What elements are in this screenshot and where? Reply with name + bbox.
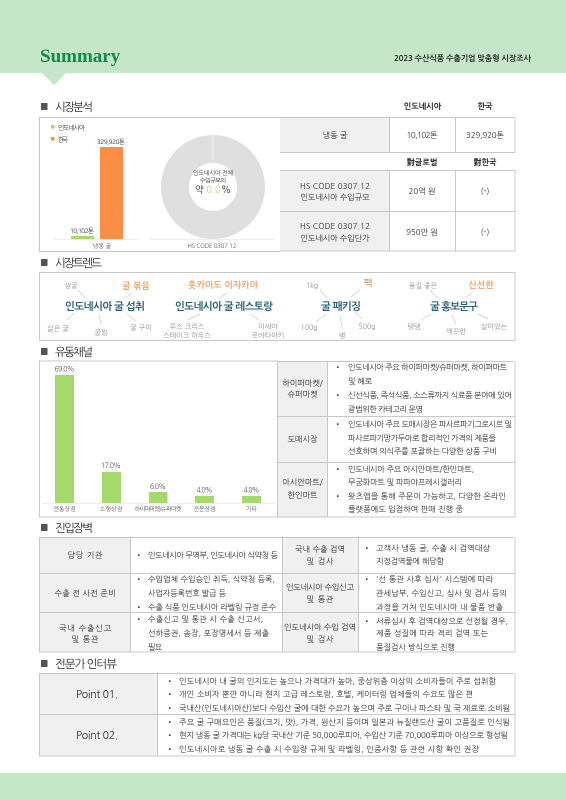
row: hypermarket: 인도네시아 주요 하이퍼마켓/슈퍼마켓, 하이퍼마트: [348, 363, 507, 372]
point 01: 개인 소비자 뿐만 아니라 현지 고급 레스토랑, 호텔, 케이터링 업체들의 수요도 많은 편: [179, 690, 473, 699]
cell: pre-export preparation: 사업자등록번호 발급 등: [148, 589, 226, 598]
legend: 한국: [58, 136, 68, 143]
trend: oyster packaging: 500g: [359, 324, 375, 331]
cell: indonesia import quarantine: •: [363, 618, 371, 626]
cell: responsible agencies: 담당 기관: [68, 551, 103, 560]
bar: other: 4.0%: [244, 488, 260, 494]
cell: indonesia import clearance: 인도네시아 수입신고: [286, 583, 354, 592]
bar: small stores: [100, 463, 122, 512]
row: asian mart: 플랫폼에도 입점하여 판매 진행 중: [348, 505, 463, 514]
row: wholesale market: [287, 420, 512, 456]
bar: traditional stores: 전통상점: [53, 506, 76, 512]
cell: pre-export preparation: •: [135, 576, 143, 584]
table: market analysis: 10,102톤: [406, 131, 438, 140]
title: Summary: [40, 46, 121, 67]
cell: indonesia import clearance: [286, 575, 507, 612]
cell: domestic export quarantine: 고객사 냉동 굴, 수출 시 검역대상: [376, 544, 490, 553]
trend: oyster consumption: 생굴: [64, 282, 78, 290]
bar: small stores: 소형상점: [100, 506, 122, 512]
table: market analysis: (-): [481, 186, 489, 196]
donut chart: import share: [150, 130, 275, 249]
trend: oyster promotion copy: 탱탱: [407, 323, 421, 331]
heading: market analysis: 시장분석: [55, 101, 93, 113]
bar: hypermarket and supermarket: 6.0%: [150, 484, 166, 491]
cell: indonesia import quarantine: 품질검사 방식으로 진행: [376, 643, 455, 652]
point 01: 인도네시아 내 굴의 인지도는 높으나 가격대가 높아, 중상위층 이상의 소비자들이 주로 섭취함: [179, 677, 496, 686]
point 02: 현지 냉동 굴 가격대는 kg당 국내산 기준 50,000루피아, 수입산 기준 70,000루피아 이상으로 형성됨: [179, 731, 508, 740]
header band: [0, 0, 566, 85]
table: market analysis: (-): [481, 227, 489, 237]
trend: oyster restaurants: 인도네시아 굴 레스토랑: [175, 301, 273, 312]
row: wholesale market: 선호하며 의식주를 포괄하는 다양한 상품 구비: [348, 447, 497, 456]
cell: domestic export clearance: 선하증권, 송장, 포장명세서 등 제출: [148, 629, 269, 638]
row: hypermarket: 슈퍼마켓: [287, 390, 318, 399]
trend: oyster restaurants: 이세야: [258, 323, 278, 331]
cell: domestic export quarantine: 및 검사: [306, 557, 334, 566]
row: wholesale market: 도매시장: [287, 435, 318, 444]
panel: market trends: [40, 272, 515, 340]
cell: indonesia import clearance: '선 통관 사후 심사' 시스템에 따라: [376, 575, 493, 584]
row: wholesale market: 인도네시아 주요 도매시장은 파사르파기그로시르 및: [348, 420, 512, 429]
bar: other: 기타: [246, 506, 257, 512]
cell: indonesia import quarantine: 및 검사: [306, 635, 334, 644]
column headers: market analysis: 인도네시아: [404, 102, 442, 111]
point 02: Point 02.: [76, 730, 118, 741]
table: market analysis: 329,920톤: [466, 131, 504, 140]
trend: oyster packaging: 굴 패키징: [321, 301, 361, 312]
report subtitle: 2023 수산식품 수출기업 맞춤형 시장조사: [394, 54, 531, 63]
trend: oyster consumption: 삶은 굴: [47, 325, 69, 333]
heading: market trends: 시장트렌드: [55, 257, 102, 269]
table: entry barriers: [39, 537, 515, 652]
point 02: •: [166, 732, 174, 740]
trend: oyster consumption: 굴 구이: [130, 324, 152, 332]
panel: distribution bar chart: [40, 361, 278, 517]
table: market analysis: 냉동 굴: [323, 131, 348, 140]
trend: oyster consumption: 인도네시아 굴 섭취: [65, 301, 145, 312]
table: market analysis: 對글로벌: [407, 157, 437, 167]
heading: entry barriers: 진입장벽: [55, 522, 93, 534]
bar: specialty stores: 전문상점: [193, 506, 216, 512]
trend: oyster promotion copy: 살아있는: [481, 323, 508, 331]
bar chart: frozen oyster volume: 10,102톤: [70, 227, 94, 234]
point 01: [76, 677, 510, 713]
table: market analysis: [280, 117, 515, 251]
table: market analysis: HS CODE 0307.12: [300, 222, 370, 231]
trend: oyster promotion copy: 굴 홍보문구: [430, 301, 478, 312]
row: asian mart: 한인마트: [287, 491, 318, 500]
bar: hypermarket and supermarket: [134, 484, 182, 512]
trend: oyster consumption: [47, 281, 152, 337]
bar: traditional stores: [53, 366, 76, 512]
legend: 인도네시아: [58, 124, 85, 131]
point 01: 국내산(인도네시아산)보다 수입산 굴에 대한 수요가 높으며 주로 구이나 파스타 및 국 재료로 소비됨: [179, 703, 510, 713]
cell: indonesia import quarantine: [284, 617, 508, 652]
trend: oyster packaging: 팩: [364, 278, 372, 288]
table: distribution channels: [278, 361, 515, 517]
cell: domestic export clearance: 및 통관: [72, 635, 99, 644]
cell: indonesia import clearance: 과정을 거쳐 인도네시아 내 물품 반출: [376, 603, 503, 612]
row: hypermarket: 및 헤로: [348, 377, 372, 386]
table: market analysis: 인도네시아 수입단가: [300, 234, 370, 243]
cell: responsible agencies: •: [135, 552, 143, 560]
point 01: •: [166, 678, 174, 686]
point 02: •: [166, 719, 174, 727]
trend: oyster restaurants: 로바타야키: [252, 332, 284, 340]
trend: oyster restaurants: [163, 280, 284, 340]
bar chart: frozen oyster volume: 329,920톤: [97, 138, 125, 145]
cell: domestic export clearance: 수출신고 및 통관 시 수출 신고서,: [148, 615, 263, 624]
cell: responsible agencies: 인도네시아 무역부, 인도네시아 식약청 등: [148, 551, 278, 560]
cell: domestic export clearance: •: [135, 616, 143, 624]
point 02: 인도네시아로 냉동 굴 수출 시 수입량 규제 및 라벨링, 인증사항 등 관련 사항 확인 권장: [179, 745, 479, 754]
bar: hypermarket and supermarket: 하이퍼마켓/슈퍼마켓: [134, 506, 182, 512]
point 02: 주요 굴 구매요인은 품질(크기, 맛), 가격, 원산지 등이며 일본과 뉴질랜드산 굴이 고품질로 인식됨: [179, 717, 510, 727]
cell: indonesia import quarantine: 인도네시아 수입 검역: [284, 623, 356, 632]
trend: oyster packaging: [301, 278, 375, 340]
cell: pre-export preparation: 수입업체 수입승인 취득, 식약청 등록,: [148, 575, 275, 584]
row: asian mart: 왓츠앱을 통해 주문이 가능하고, 다양한 온라인: [348, 492, 506, 501]
point 01: •: [166, 705, 174, 713]
table: market analysis: 인도네시아 수입규모: [300, 193, 370, 202]
cell: indonesia import clearance: 관세납부, 수입신고, 심사 및 검사 등의: [376, 589, 507, 598]
cell: indonesia import quarantine: 제품 성질에 따라 격리 검역 또는: [376, 629, 488, 638]
cell: pre-export preparation: [54, 575, 276, 612]
cell: indonesia import clearance: 및 통관: [306, 595, 334, 604]
cell: responsible agencies: [68, 551, 278, 560]
row: asian mart: •: [334, 493, 342, 501]
bar chart: frozen oyster volume: [54, 138, 140, 249]
cell: domestic export clearance: 국내 수출신고: [59, 624, 111, 633]
bar: small stores: 17.0%: [101, 463, 121, 470]
donut chart: import share: HS CODE 0307.12: [188, 243, 237, 249]
point 01: Point 01.: [76, 689, 118, 700]
row: wholesale market: 파사르파기망가두아로 합리적인 가격의 제품을: [348, 434, 496, 443]
donut chart: import share: 수입규모의: [200, 178, 226, 184]
footer band: [0, 773, 566, 800]
trend: oyster restaurants: 스테이크 하우스: [163, 332, 211, 340]
trend: oyster promotion copy: 품질 좋은: [409, 282, 438, 290]
row: asian mart: 아시안마트/: [282, 478, 323, 487]
point 02: [76, 717, 510, 754]
row: hypermarket: [282, 363, 512, 414]
table: expert interview: [39, 673, 515, 756]
donut chart: import share: 약 0.0%: [195, 185, 231, 195]
trend: oyster packaging: 병: [339, 332, 345, 340]
cell: indonesia import clearance: •: [363, 576, 371, 584]
cell: indonesia import quarantine: 서류심사 후 검역대상으로 선정될 경우,: [376, 617, 508, 626]
bar: specialty stores: [193, 488, 216, 512]
row: hypermarket: 신선식품, 즉석식품, 소스류까지 식료품 분야에 있어: [348, 391, 512, 400]
legend: [51, 124, 85, 143]
row: asian mart: 인도네시아 주요 아시안마트/한인마트,: [348, 465, 474, 474]
column headers: market analysis: 한국: [477, 102, 493, 111]
heading: expert interview: 전문가 인터뷰: [55, 658, 117, 670]
trend: oyster consumption: 굴찜: [94, 329, 108, 337]
cell: pre-export preparation: 수출 식품 인도네시아 라벨링 규정 준수: [148, 603, 276, 612]
cell: domestic export quarantine: 국내 수출 검역: [295, 545, 345, 554]
panel: market analysis charts: [40, 118, 280, 252]
table: market analysis: 20억 원: [409, 187, 435, 196]
bar chart: frozen oyster volume: 냉동 굴: [93, 243, 112, 249]
donut chart: import share: 인도네시아 전체: [193, 170, 233, 176]
bar: traditional stores: 69.0%: [54, 366, 74, 374]
bar: specialty stores: 4.0%: [196, 488, 212, 494]
table: market analysis: 950만 원: [406, 228, 438, 237]
cell: domestic export clearance: [59, 615, 269, 652]
trend: oyster promotion copy: 신선한: [468, 280, 494, 290]
trend: oyster packaging: 1kg: [306, 282, 318, 290]
row: hypermarket: 하이퍼마켓/: [282, 379, 323, 388]
cell: pre-export preparation: •: [135, 604, 143, 612]
table: market analysis: HS CODE 0307.12: [300, 182, 370, 191]
row: wholesale market: •: [334, 421, 342, 429]
row: hypermarket: •: [334, 364, 342, 372]
bar: other: [242, 488, 261, 512]
row: hypermarket: 광범위한 카테고리 운영: [348, 405, 423, 414]
trend: oyster consumption: 굴 볶음: [122, 281, 150, 291]
heading: distribution channels: 유동채널: [55, 346, 93, 358]
row: asian mart: •: [334, 466, 342, 474]
cell: domestic export quarantine: [295, 544, 490, 566]
cell: domestic export quarantine: •: [363, 545, 371, 553]
trend: oyster promotion copy: 깨끗한: [446, 328, 466, 336]
cell: domestic export clearance: 필요: [148, 643, 162, 652]
trend: oyster packaging: 100g: [301, 325, 317, 332]
point 02: •: [166, 746, 174, 754]
table: market analysis: 對한국: [473, 157, 497, 167]
row: asian mart: [282, 465, 506, 514]
row: asian mart: 무궁화마트 및 파파야프레시갤러리: [348, 478, 462, 487]
row: hypermarket: •: [334, 392, 342, 400]
cell: pre-export preparation: 수출 전 사전 준비: [54, 589, 116, 598]
point 01: •: [166, 691, 174, 699]
trend: oyster restaurants: 홋카이도 이자카야: [188, 280, 259, 290]
trend: oyster promotion copy: [407, 280, 508, 336]
trend: oyster restaurants: 루스 크리스: [170, 323, 205, 331]
column headers: market analysis: [404, 102, 493, 111]
cell: domestic export quarantine: 지정검역물에 해당함: [376, 557, 444, 566]
